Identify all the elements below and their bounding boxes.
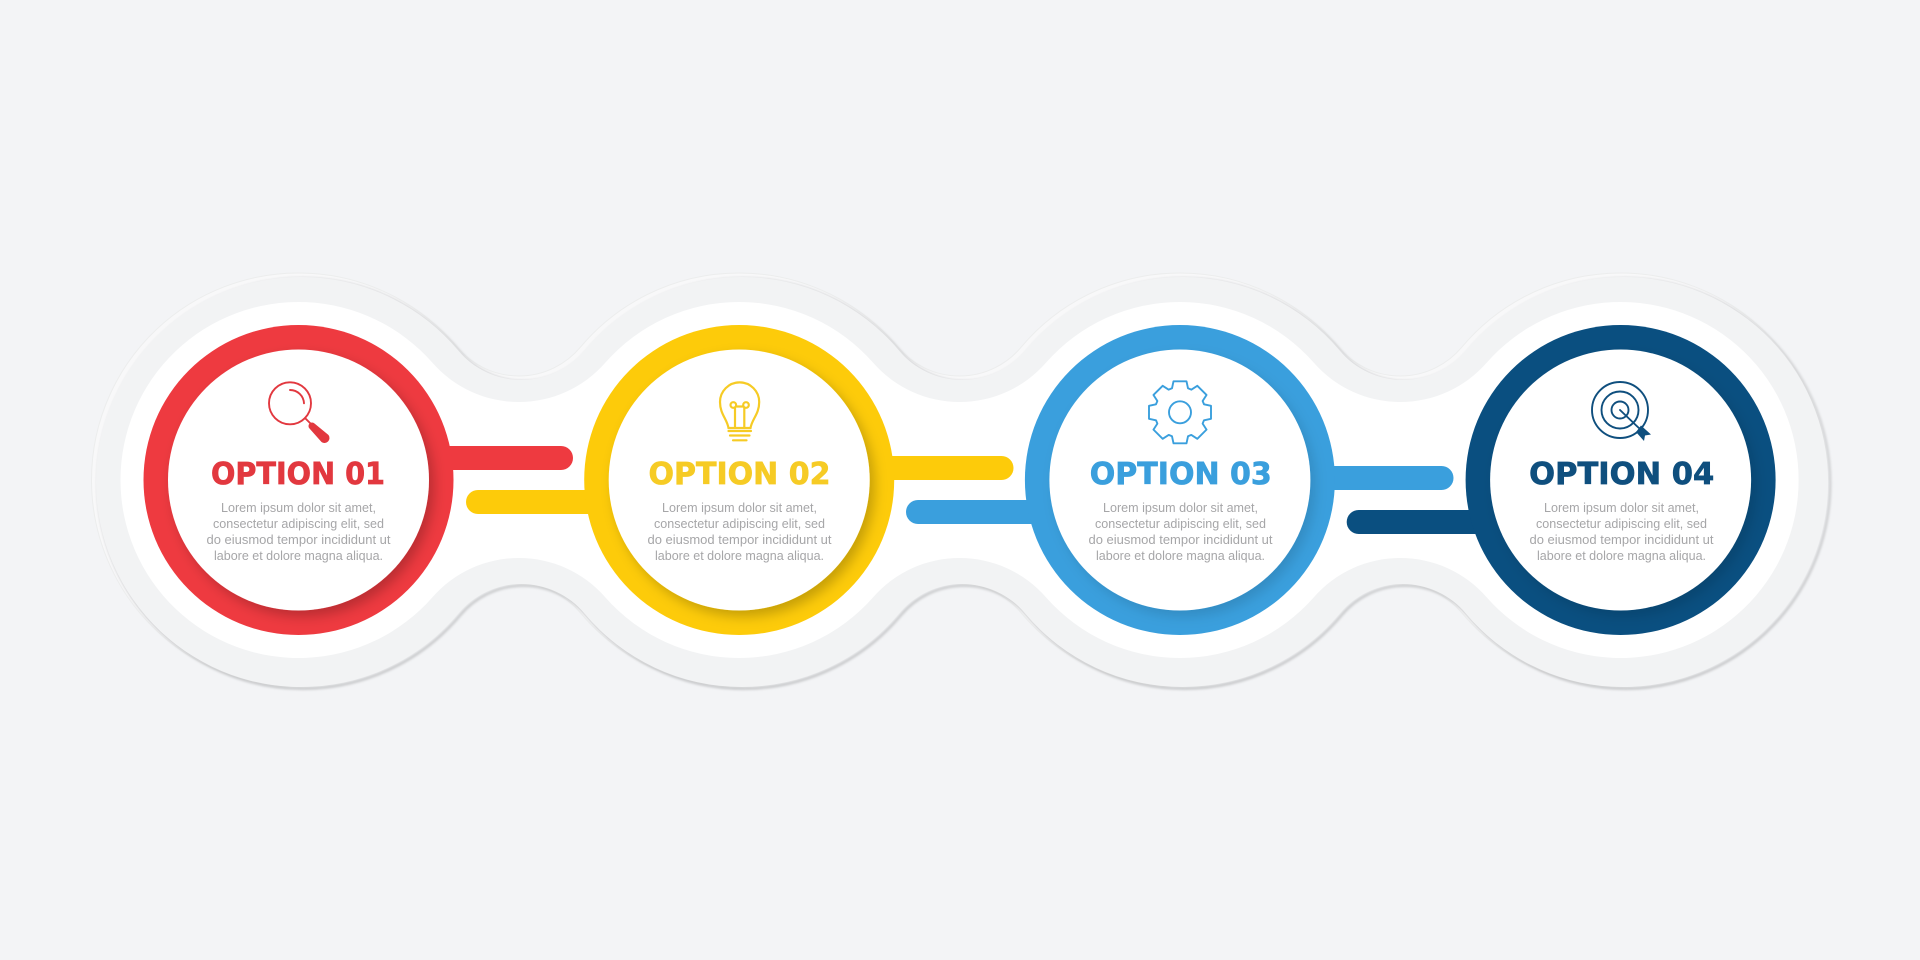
connector: blue right bbox=[1310, 466, 1454, 490]
icon: gear bbox=[1149, 381, 1211, 443]
text: option 01 body: consectetur adipiscing elit, sed bbox=[213, 516, 384, 531]
text: option 03 body: Lorem ipsum dolor sit amet, bbox=[1103, 500, 1258, 515]
icon: magnifying glass bbox=[269, 382, 330, 443]
panel: option 02 bbox=[466, 325, 1014, 635]
panel: option 03 bbox=[906, 325, 1454, 635]
text: option 02 body: Lorem ipsum dolor sit amet, bbox=[662, 500, 817, 515]
connector: blue left bbox=[906, 500, 1050, 524]
text: option 01 body: labore et dolore magna aliqua. bbox=[214, 548, 383, 563]
heading: option 01: OPTION 01 bbox=[211, 457, 385, 492]
text: option 01 body bbox=[206, 500, 391, 563]
panel: white band bbox=[120, 302, 1799, 658]
panel: shadow line bbox=[98, 278, 1830, 688]
icon: target bbox=[1592, 382, 1651, 441]
icon: light bulb bbox=[720, 382, 759, 440]
ring: blue bbox=[1025, 325, 1335, 635]
text: option 04 body: do eiusmod tempor incididunt ut bbox=[1530, 532, 1714, 547]
ring: navy bbox=[1466, 325, 1776, 635]
text: option 01 body: do eiusmod tempor incididunt ut bbox=[206, 532, 391, 547]
text: option 03 body bbox=[1088, 500, 1273, 563]
text: option 03 body: do eiusmod tempor incididunt ut bbox=[1088, 532, 1273, 547]
inner circle bbox=[1049, 350, 1310, 610]
text: option 02 body: consectetur adipiscing elit, sed bbox=[654, 516, 825, 531]
text: option 02 body bbox=[648, 500, 832, 563]
panel: option 01 bbox=[144, 325, 573, 635]
panel: option 04 bbox=[1347, 325, 1776, 635]
panel: outer paper lip bbox=[92, 273, 1828, 687]
text: option 02 body: labore et dolore magna aliqua. bbox=[655, 548, 824, 563]
heading: option 02: OPTION 02 bbox=[648, 457, 830, 492]
text: option 03 body: labore et dolore magna aliqua. bbox=[1096, 548, 1265, 563]
connector: yellow right bbox=[870, 456, 1014, 480]
text: option 01 body: Lorem ipsum dolor sit amet, bbox=[221, 500, 376, 515]
connector: navy bbox=[1347, 510, 1491, 534]
text: option 04 body: Lorem ipsum dolor sit amet, bbox=[1544, 500, 1699, 515]
connector: yellow left bbox=[466, 490, 609, 514]
inner circle bbox=[1490, 350, 1751, 610]
connector: red bbox=[430, 446, 573, 470]
panel: gray band bbox=[96, 277, 1828, 687]
text: option 04 body: labore et dolore magna aliqua. bbox=[1537, 548, 1706, 563]
text: option 02 body: do eiusmod tempor incididunt ut bbox=[648, 532, 832, 547]
heading: option 03: OPTION 03 bbox=[1090, 457, 1272, 492]
text: option 03 body: consectetur adipiscing elit, sed bbox=[1095, 516, 1266, 531]
text: option 04 body: consectetur adipiscing elit, sed bbox=[1536, 516, 1707, 531]
text: option 04 body bbox=[1530, 500, 1714, 563]
ring: red bbox=[144, 325, 454, 635]
heading: option 04: OPTION 04 bbox=[1529, 457, 1714, 492]
ring: yellow bbox=[584, 325, 894, 635]
inner circle bbox=[168, 350, 429, 610]
inner circle bbox=[609, 350, 870, 610]
